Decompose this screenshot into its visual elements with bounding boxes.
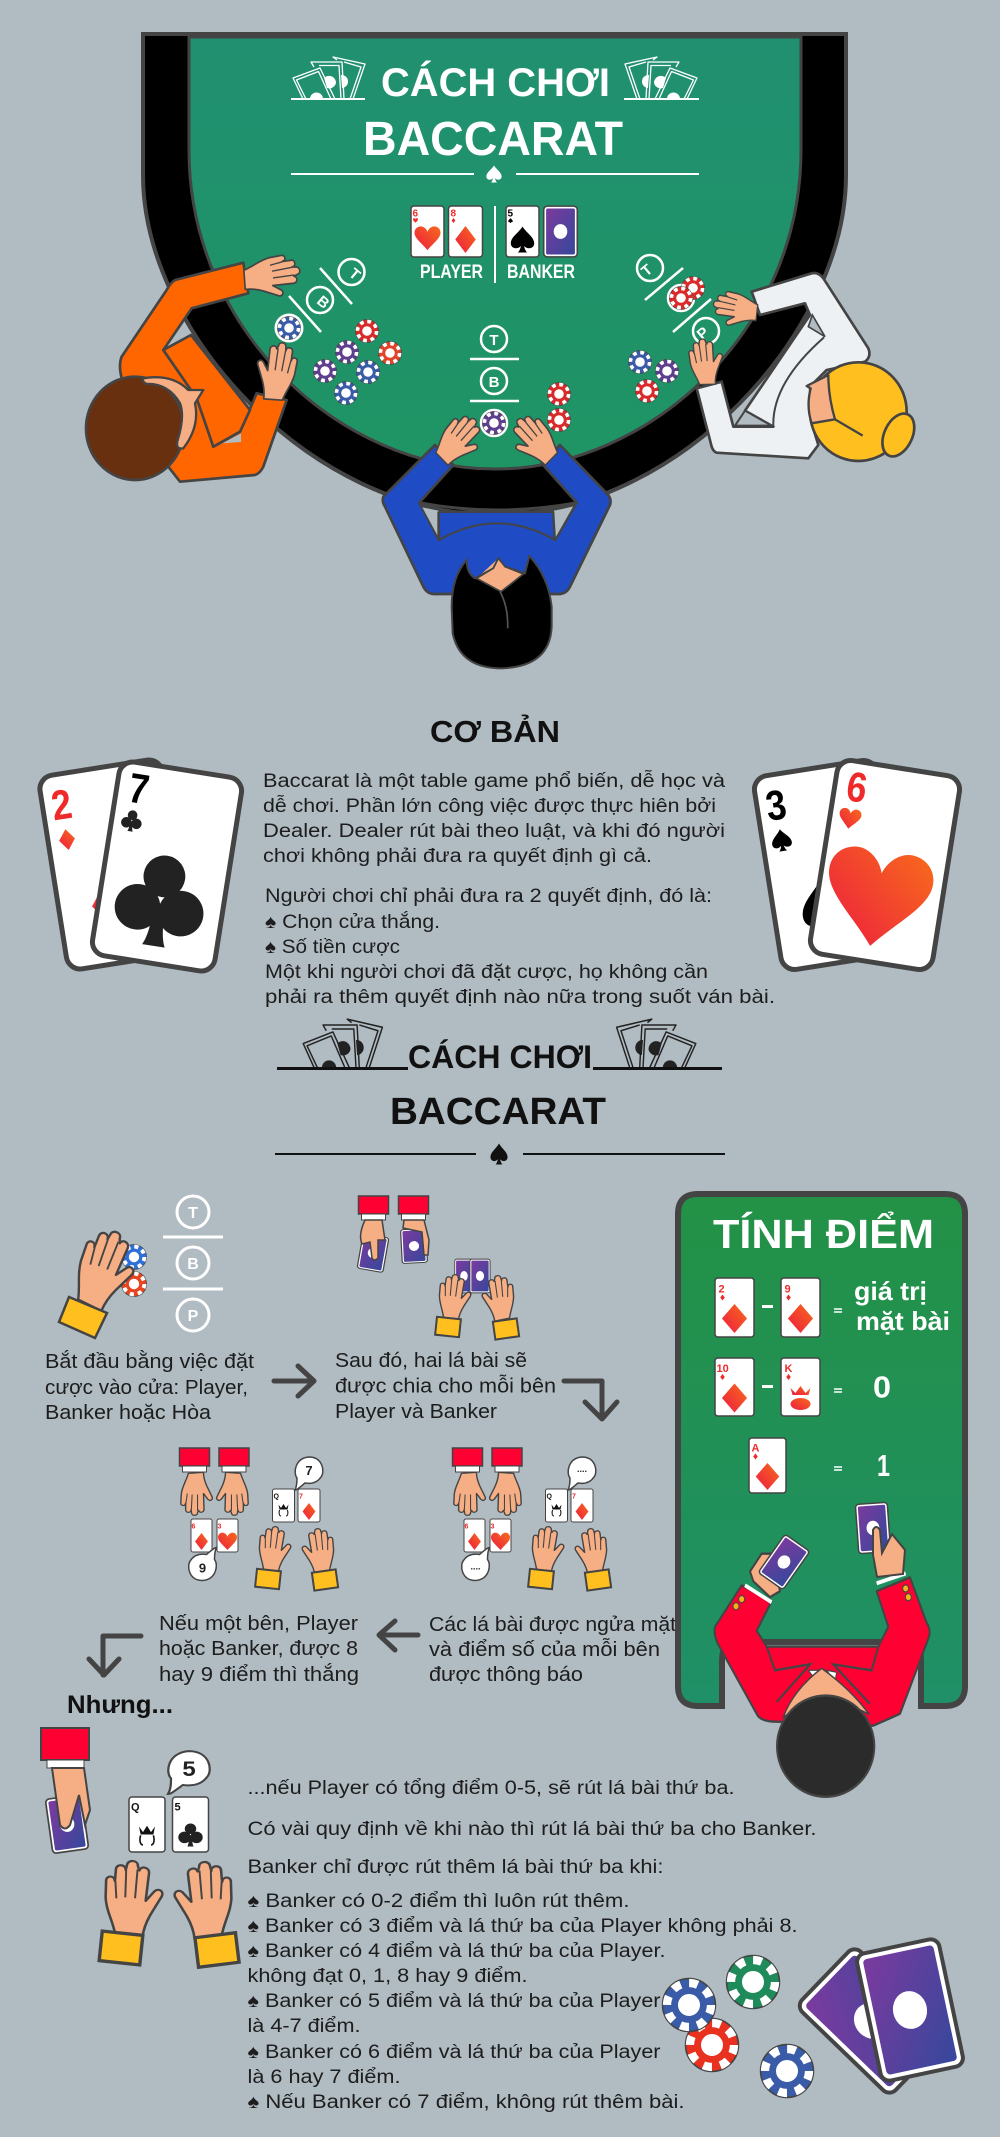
right hand xyxy=(503,409,565,472)
betting circles: T xyxy=(188,1205,198,1222)
bubble: banker score: 7 xyxy=(305,1463,313,1478)
step text: Player và Banker xyxy=(335,1401,497,1423)
face xyxy=(807,375,835,423)
left hand xyxy=(428,409,491,472)
dealer cuff xyxy=(41,1728,89,1768)
hand placing chips xyxy=(66,1223,145,1317)
basics text block one: dễ chơi. Phần lớn công việc được thực hiên bởi xyxy=(263,795,716,817)
basics text block two: ♠ Chọn cửa thắng. xyxy=(265,911,440,933)
arrow bend down xyxy=(564,1381,617,1419)
icon: cards right xyxy=(617,1019,696,1068)
dealt card right xyxy=(401,1228,427,1264)
table felt xyxy=(189,37,801,469)
heading line two: BACCARAT xyxy=(390,1091,606,1133)
hand by chips xyxy=(688,337,725,386)
dealer cuffs xyxy=(358,1196,428,1220)
player cuffs xyxy=(435,1317,519,1340)
player in blue xyxy=(383,409,611,668)
baccarat table xyxy=(143,34,846,515)
card: six of diamonds xyxy=(464,1519,485,1552)
hand on table xyxy=(241,253,303,301)
row: ace xyxy=(749,1438,890,1493)
neck overlay xyxy=(477,558,523,592)
card: six of hearts: 6 xyxy=(412,208,418,220)
icon: cards right xyxy=(625,57,697,99)
row: two to nine: 2 xyxy=(718,1284,725,1296)
dealer card right xyxy=(855,1502,891,1554)
chip blue two xyxy=(663,1979,715,2031)
card: face down xyxy=(544,206,577,257)
step two: deal cards xyxy=(335,1196,556,1423)
bubble: five xyxy=(168,1751,210,1794)
blonde hair xyxy=(810,362,907,461)
how to play heading xyxy=(275,1019,725,1164)
card: eight of diamonds xyxy=(448,206,482,257)
left betting area xyxy=(289,259,364,332)
step text: Nếu một bên, Player xyxy=(159,1613,358,1635)
third card rules text xyxy=(248,1778,816,2113)
card: six of hearts xyxy=(808,759,962,971)
lapels xyxy=(767,1647,878,1704)
card: seven of clubs xyxy=(90,760,244,973)
third card rules text: ♠ Banker có 0-2 điểm thì luôn rút thêm. xyxy=(248,1891,630,1912)
hand by chip xyxy=(253,340,299,403)
shirt cuffs xyxy=(745,1573,906,1602)
card: seven of diamonds: 7 xyxy=(572,1494,576,1500)
center betting area: T xyxy=(489,332,499,349)
card back front xyxy=(855,1938,965,2082)
hero title xyxy=(291,57,699,182)
step three: cards revealed, winner xyxy=(159,1448,359,1686)
bubble: thinking player xyxy=(462,1548,490,1580)
step text: cược vào cửa: Player, xyxy=(45,1377,248,1399)
player in white xyxy=(688,273,921,461)
step text: Các lá bài được ngửa mặt xyxy=(429,1614,676,1636)
card: queen of spades xyxy=(129,1797,165,1852)
shirt collar xyxy=(808,1670,837,1681)
label banker: BANKER xyxy=(507,262,575,283)
row: ace: A xyxy=(752,1442,760,1454)
card: two of diamonds xyxy=(38,758,191,971)
card: six of hearts: 6 xyxy=(843,762,870,812)
step text: và điểm số của mỗi bên xyxy=(429,1638,660,1661)
card: three of hearts: 3 xyxy=(490,1524,494,1530)
table rim xyxy=(143,34,846,515)
bubble: thinking player: .... xyxy=(470,1562,481,1572)
step text xyxy=(335,1350,556,1423)
card: five of clubs: 5 xyxy=(174,1802,181,1814)
card: three of hearts xyxy=(490,1519,511,1552)
neck xyxy=(783,1668,869,1717)
orange shirt xyxy=(120,263,287,482)
step text: được chia cho mỗi bên xyxy=(335,1374,556,1398)
heading rules xyxy=(275,1067,725,1164)
cuff xyxy=(59,1297,107,1338)
card: seven of diamonds xyxy=(571,1489,593,1522)
step text: hoặc Banker, được 8 xyxy=(159,1638,358,1660)
row: ten to king xyxy=(715,1358,891,1416)
card: five of clubs xyxy=(172,1797,208,1852)
card: three of hearts: 3 xyxy=(218,1524,222,1530)
card: five of spades xyxy=(506,206,539,257)
row: two to nine: mặt bài xyxy=(856,1306,950,1336)
third card rules text: ♠ Nếu Banker có 7 điểm, không rút thêm bài. xyxy=(248,2092,684,2113)
card: seven of diamonds xyxy=(298,1489,320,1522)
card: three of spades: 3 xyxy=(762,780,790,830)
cards: three and six xyxy=(752,759,962,971)
bubble: player score: 9 xyxy=(199,1560,206,1576)
player cards xyxy=(455,1259,490,1293)
icon: cards left xyxy=(293,57,365,99)
title divider xyxy=(291,98,699,182)
basics text block two: ♠ Số tiền cược xyxy=(265,937,400,958)
decorative chips and cards xyxy=(663,1938,965,2097)
third card rules text: ♠ Banker có 5 điểm và lá thứ ba của Player xyxy=(248,1991,661,2012)
label player: PLAYER xyxy=(420,262,483,283)
dealer hands xyxy=(361,1220,429,1260)
shirt gaps xyxy=(735,411,772,426)
shirt fold xyxy=(773,337,824,427)
dealer right hand xyxy=(873,1527,905,1577)
third card illustration xyxy=(41,1728,239,1967)
bubble: thinking banker xyxy=(568,1457,596,1490)
step text: Sau đó, hai lá bài sẽ xyxy=(335,1350,527,1372)
table chips xyxy=(274,276,705,435)
dealer xyxy=(715,1554,930,1797)
step text xyxy=(45,1350,254,1424)
player right hand xyxy=(480,1274,517,1322)
shirt gaps xyxy=(422,507,573,538)
third card rules text: ♠ Banker có 6 điểm và lá thứ ba của Player xyxy=(248,2042,661,2063)
card: seven of clubs: 7 xyxy=(125,764,152,813)
dealer hair xyxy=(777,1696,874,1797)
red jacket xyxy=(715,1577,930,1726)
basics text block two xyxy=(265,886,775,1008)
arrow right xyxy=(274,1366,314,1396)
card: six of diamonds xyxy=(191,1519,212,1552)
player cuffs xyxy=(255,1569,338,1591)
row: two to nine: giá trị xyxy=(854,1276,927,1306)
panel title: TÍNH ĐIỂM xyxy=(713,1210,934,1257)
dealer hands xyxy=(181,1472,248,1515)
panel: scoring xyxy=(678,1194,965,1797)
table edge xyxy=(419,503,577,510)
chip red xyxy=(686,2019,738,2071)
dealer card left xyxy=(758,1534,810,1590)
player hands xyxy=(256,1525,337,1575)
third card xyxy=(45,1794,89,1854)
buttons xyxy=(733,1585,911,1610)
collar line xyxy=(438,512,555,540)
right betting area: T xyxy=(638,261,656,280)
left betting area: B xyxy=(313,293,333,313)
step text xyxy=(159,1613,359,1686)
dealt card left xyxy=(357,1233,389,1273)
basics text block one: chơi không phải đưa ra quyết định gì cả. xyxy=(263,846,652,867)
player cuffs xyxy=(528,1569,611,1591)
row: ten to king: 10 xyxy=(716,1363,729,1375)
third card rules text: ...nếu Player có tổng điểm 0-5, sẽ rút lá bài thứ ba. xyxy=(248,1778,734,1799)
arrow bend down left xyxy=(89,1636,141,1675)
left betting area: T xyxy=(345,265,363,284)
basics text block two: Một khi người chơi đã đặt cược, họ không cần xyxy=(265,962,708,983)
step text: Bắt đầu bằng việc đặt xyxy=(45,1350,254,1373)
card: two of diamonds: 2 xyxy=(48,780,75,829)
card back behind xyxy=(796,1946,948,2096)
row: ace: 1 xyxy=(877,1448,890,1483)
dealer hand xyxy=(52,1768,90,1828)
betting circles: P xyxy=(188,1308,199,1325)
bubble: banker score xyxy=(295,1457,323,1490)
hair parting xyxy=(500,592,508,628)
third card rules text: Có vài quy định về khi nào thì rút lá bài thứ ba cho Banker. xyxy=(248,1819,816,1840)
heading line one: CÁCH CHƠI xyxy=(408,1039,592,1075)
card: queen: Q xyxy=(546,1494,552,1500)
betting circles: B xyxy=(187,1256,199,1273)
arrow left xyxy=(379,1621,418,1650)
title line two: BACCARAT xyxy=(363,113,623,166)
dealer cuffs xyxy=(180,1448,249,1472)
step text: hay 9 điểm thì thắng xyxy=(159,1663,359,1686)
blue shirt xyxy=(383,445,611,594)
neck xyxy=(477,558,523,592)
right cuff xyxy=(195,1933,239,1967)
row: ten to king: K xyxy=(784,1363,792,1375)
title line one: CÁCH CHƠI xyxy=(381,60,610,105)
row: ten to king: 0 xyxy=(873,1370,891,1404)
betting circles xyxy=(163,1196,223,1331)
card: queen of spades: Q xyxy=(131,1802,140,1814)
card: queen: Q xyxy=(274,1494,280,1500)
right betting area: P xyxy=(694,324,712,343)
basics text block two: phải ra thêm quyết định nào nữa trong suốt ván bài. xyxy=(265,987,775,1008)
dealer hands xyxy=(454,1472,521,1515)
third card rules text: ♠ Banker có 3 điểm và lá thứ ba của Player không phải 8. xyxy=(248,1916,798,1937)
white shirt xyxy=(697,273,869,458)
hair bun xyxy=(876,409,921,461)
card: eight of diamonds: 8 xyxy=(450,208,456,220)
card: six of diamonds: 6 xyxy=(464,1524,468,1530)
icon: cards left xyxy=(303,1019,382,1068)
row: two to nine: 9 xyxy=(784,1284,791,1296)
chips under hand xyxy=(122,1245,146,1269)
basics text block one: Baccarat là một table game phổ biến, dễ học và xyxy=(263,770,725,792)
card: three of hearts xyxy=(217,1519,238,1552)
basics text block one: Dealer. Dealer rút bài theo luật, và khi đó người xyxy=(263,821,725,842)
step text: được thông báo xyxy=(429,1664,583,1686)
third card rules text: là 4-7 điểm. xyxy=(248,2016,360,2037)
black hair xyxy=(452,556,552,668)
dealer cuffs xyxy=(452,1448,522,1472)
divider xyxy=(494,206,496,283)
bubble: thinking banker: .... xyxy=(577,1464,587,1474)
step text: Banker hoặc Hòa xyxy=(45,1402,212,1424)
step four: cards face up xyxy=(429,1448,676,1686)
cards: two and seven xyxy=(38,758,244,973)
card: three of spades xyxy=(752,759,906,971)
but heading: Nhưng... xyxy=(67,1691,173,1719)
shirt gaps xyxy=(171,322,241,443)
center betting area xyxy=(470,326,519,436)
right hand xyxy=(172,1860,236,1941)
card: queen xyxy=(546,1489,568,1522)
third card rules text: Banker chỉ được rút thêm lá bài thứ ba khi: xyxy=(248,1857,664,1878)
shirt torso xyxy=(163,335,250,447)
center betting area: B xyxy=(489,374,500,391)
card: five of spades: 5 xyxy=(508,208,514,220)
player and banker cards xyxy=(411,206,577,283)
card: seven of diamonds: 7 xyxy=(299,1494,303,1500)
row: two to nine xyxy=(715,1276,950,1337)
card: six of diamonds: 6 xyxy=(192,1524,196,1530)
third card rules text: ♠ Banker có 4 điểm và lá thứ ba của Player. xyxy=(248,1941,666,1962)
hair line xyxy=(835,419,863,436)
card: queen xyxy=(272,1489,294,1522)
chip blue xyxy=(761,2045,813,2097)
right betting area xyxy=(637,255,719,344)
brown hair xyxy=(86,377,184,480)
third card rules text: không đạt 0, 1, 8 hay 9 điểm. xyxy=(248,1966,528,1987)
bubble: five: 5 xyxy=(182,1757,196,1780)
chip green xyxy=(727,1956,779,2008)
left cuff xyxy=(99,1931,143,1965)
bubble: player score xyxy=(189,1548,216,1580)
basics text block one xyxy=(263,770,725,867)
player in orange xyxy=(86,253,303,482)
panel background xyxy=(678,1194,965,1706)
betting areas xyxy=(289,255,719,436)
face xyxy=(143,377,203,449)
basics text block two: Người chơi chỉ phải đưa ra 2 quyết định, đó là: xyxy=(265,886,712,907)
player left hand xyxy=(436,1273,473,1321)
hand on table xyxy=(710,289,760,330)
player hands xyxy=(529,1525,610,1575)
third card rules text: là 6 hay 7 điểm. xyxy=(248,2067,400,2088)
card: six of hearts xyxy=(411,206,444,257)
left hand xyxy=(750,1554,780,1597)
left hand xyxy=(101,1859,165,1940)
section heading: basics: CƠ BẢN xyxy=(430,714,560,749)
step text xyxy=(429,1614,676,1686)
step one: place bet xyxy=(45,1196,254,1424)
